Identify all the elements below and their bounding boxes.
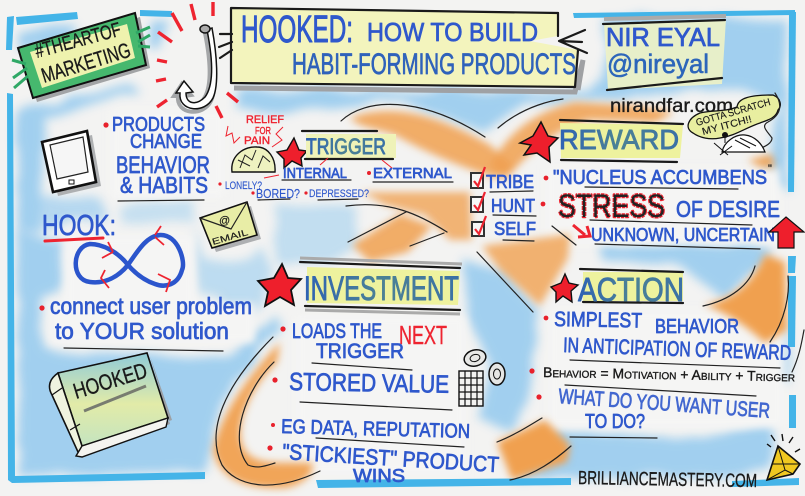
icon: mouse bbox=[722, 135, 765, 152]
text: stickiest product wins: "STICKIEST" PRODUCT bbox=[282, 439, 500, 477]
text: connect user problem: to YOUR solution bbox=[55, 318, 229, 344]
section: trigger bbox=[218, 114, 453, 201]
icon: Hooked book bbox=[50, 353, 172, 458]
text: nucleus accumbens: " bbox=[768, 163, 772, 175]
text: internal and external triggers: INTERNAL bbox=[283, 165, 347, 182]
text: loads the next trigger: TRIGGER bbox=[316, 340, 404, 363]
text: stored value bbox=[272, 368, 452, 410]
text: relief for pain: RELIEF bbox=[246, 114, 284, 126]
icon: fishhook with red rays bbox=[156, 2, 238, 118]
icon: red star bbox=[520, 122, 558, 162]
text: internal and external triggers: DEPRESSED? bbox=[309, 188, 369, 200]
heading: investment: INVESTMENT bbox=[304, 270, 459, 308]
icon: gold diamond bbox=[767, 434, 800, 480]
text: products change behavior: & HABITS bbox=[120, 172, 208, 198]
icon: infinity loop bbox=[76, 226, 183, 292]
heading: trigger: TRIGGER bbox=[306, 134, 386, 159]
text: data and reputation: EG DATA, REPUTATION bbox=[281, 416, 470, 443]
title box: HOOKED: bbox=[241, 9, 353, 51]
speech cloud and mouse: GOTTA SCRATCH bbox=[695, 97, 772, 129]
checklist: tribe hunt self bbox=[471, 167, 536, 241]
checklist: tribe hunt self: HUNT bbox=[491, 196, 535, 216]
icon: email envelope: EMAIL bbox=[211, 227, 249, 247]
text: behavior formula bbox=[529, 364, 795, 396]
tag: #TheArtOfMarketing bbox=[12, 13, 150, 102]
title box: HOW TO BUILD bbox=[367, 17, 538, 47]
checklist: tribe hunt self: SELF bbox=[494, 219, 536, 239]
text: simplest behavior bbox=[544, 308, 791, 368]
icon: red star bbox=[258, 264, 301, 306]
heading: reward: REWARD bbox=[559, 124, 679, 155]
text: simplest behavior: BEHAVIOR bbox=[655, 316, 739, 338]
text: stored value: STORED VALUE bbox=[289, 368, 449, 399]
text: behavior formula: Behavior = Motivation + Ability + Trigger bbox=[543, 364, 795, 384]
arrow: up red bbox=[769, 217, 804, 248]
text: nucleus accumbens: "NUCLEUS ACCUMBENS bbox=[553, 167, 767, 189]
icon: red star bbox=[277, 138, 307, 168]
author credit: Nir Eyal bbox=[603, 16, 726, 90]
icon: email envelope bbox=[200, 202, 261, 252]
text: relief for pain: FOR bbox=[255, 126, 271, 137]
icon: stack of coins bbox=[459, 347, 505, 406]
checklist: tribe hunt self: TRIBE bbox=[486, 172, 534, 192]
title box bbox=[219, 8, 587, 92]
icon: email envelope: @ bbox=[219, 215, 230, 227]
section: investment bbox=[258, 258, 505, 486]
icon: tablet bbox=[42, 131, 101, 196]
text: stress of desire: STRESS bbox=[558, 188, 665, 224]
text: what do you want user to do: TO DO? bbox=[585, 411, 645, 433]
icon: Hooked book: HOOKED bbox=[70, 358, 150, 404]
text: connect user problem: connect user problem bbox=[50, 293, 252, 319]
section: reward bbox=[520, 120, 804, 249]
text: stickiest product wins: WINS bbox=[353, 466, 405, 486]
icon: red star bbox=[551, 274, 578, 302]
text: internal and external triggers: LONELY? bbox=[225, 180, 262, 192]
author credit: Nir Eyal: NIR EYAL bbox=[606, 22, 720, 52]
text: internal and external triggers: BORED? bbox=[256, 186, 300, 201]
text: loads the next trigger: LOADS THE bbox=[292, 320, 382, 343]
text: stress of desire: OF DESIRE bbox=[676, 196, 780, 222]
orange watercolour bands bbox=[213, 102, 787, 488]
tag: #TheArtOfMarketing: #THEARTOF bbox=[33, 19, 123, 63]
text: relief for pain: PAIN bbox=[244, 135, 270, 147]
speech cloud and mouse: MY ITCH!! bbox=[701, 114, 753, 138]
section: action bbox=[529, 269, 795, 433]
sketch curves around orange bands bbox=[216, 99, 804, 485]
text: products change behavior: CHANGE bbox=[130, 131, 202, 153]
speech cloud and mouse bbox=[688, 93, 780, 155]
icon: brain with pain sparks bbox=[226, 126, 283, 172]
tag: #TheArtOfMarketing: MARKETING bbox=[39, 39, 133, 88]
text: stress of desire bbox=[541, 188, 780, 225]
white cleared text areas bbox=[50, 110, 784, 475]
text: products change behavior: PRODUCTS bbox=[112, 114, 205, 136]
text: loads the next trigger: NEXT bbox=[399, 320, 447, 350]
text: products change behavior: BEHAVIOR bbox=[116, 152, 210, 179]
text: unknown, uncertain: UNKNOWN, UNCERTAIN bbox=[591, 225, 775, 245]
title box: HABIT-FORMING PRODUCTS bbox=[292, 48, 576, 81]
text: connect user problem bbox=[39, 293, 252, 351]
author credit: Nir Eyal: @nireyal bbox=[607, 49, 709, 79]
text: unknown, uncertain bbox=[573, 225, 775, 249]
text: loads the next trigger bbox=[280, 320, 447, 370]
hook heading: HOOK: bbox=[42, 210, 116, 242]
website: nirandfar.com: nirandfar.com bbox=[610, 96, 733, 117]
text: products change behavior bbox=[103, 114, 210, 201]
heading: action: ACTION bbox=[578, 271, 684, 308]
text: internal and external triggers bbox=[218, 158, 453, 201]
text: relief for pain bbox=[244, 114, 284, 147]
text: internal and external triggers: EXTERNAL bbox=[373, 165, 452, 182]
text: simplest behavior: SIMPLEST bbox=[554, 308, 642, 333]
heading: investment bbox=[300, 258, 462, 314]
